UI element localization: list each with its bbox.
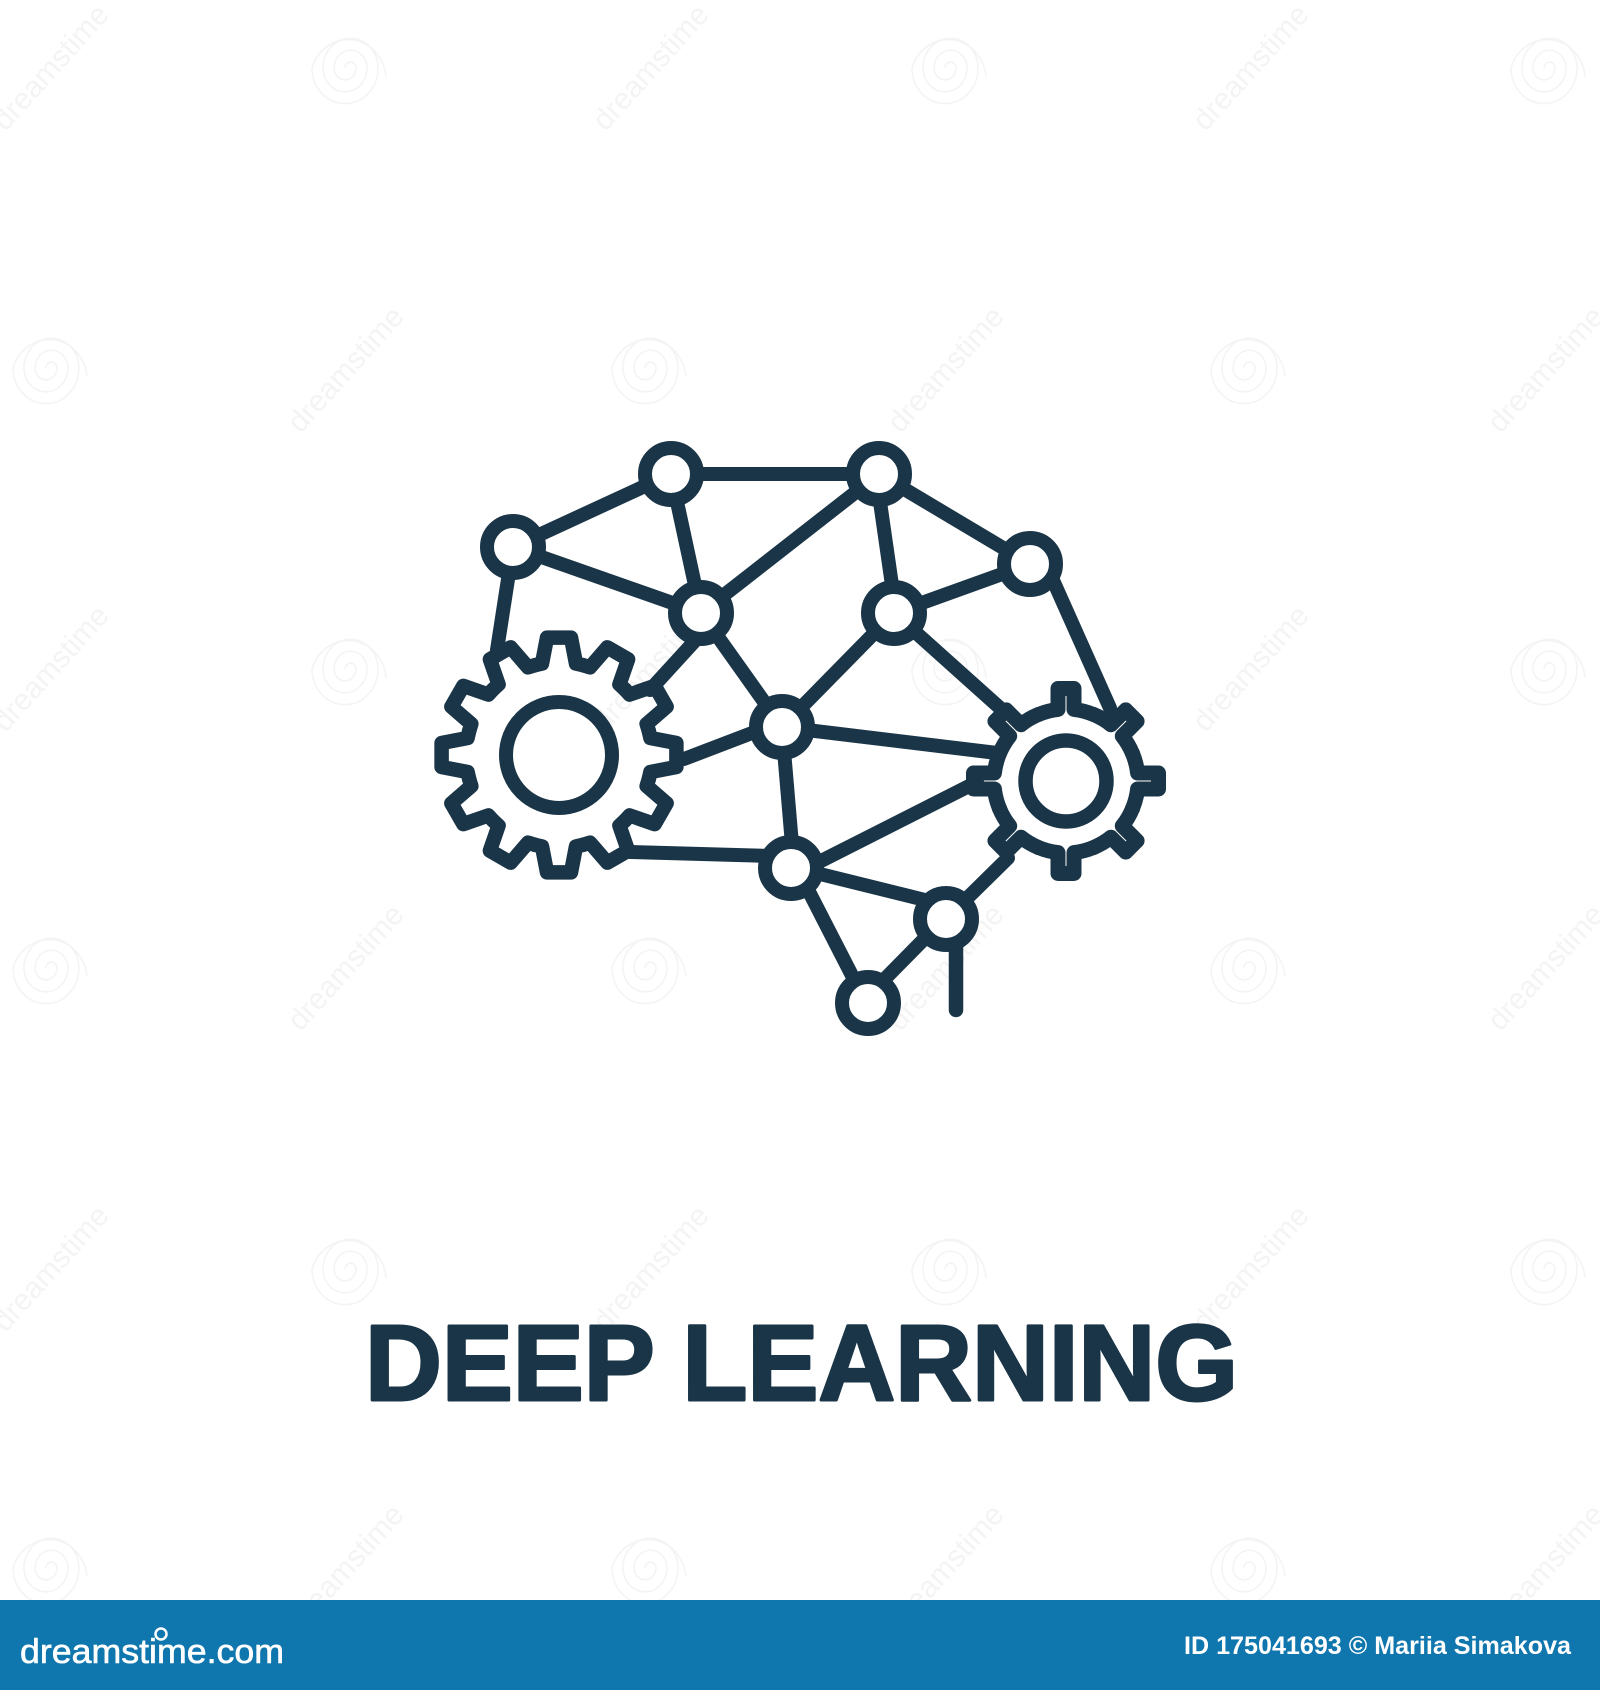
watermark pattern: dreamstime — [881, 1498, 1011, 1637]
watermark pattern: dreamstime — [281, 1498, 411, 1637]
footer bar — [0, 1600, 1600, 1690]
logo: dreamstime: dreamstime.com — [20, 1633, 284, 1671]
watermark pattern: dreamstime — [1186, 1199, 1316, 1338]
watermark pattern: dreamstime — [281, 300, 411, 439]
watermark pattern: dreamstime — [881, 898, 1011, 1037]
network connections — [497, 474, 1110, 1010]
watermark pattern: dreamstime — [881, 300, 1011, 439]
icon: brain network with gears — [442, 448, 1159, 1029]
watermark pattern: dreamstime — [1186, 0, 1316, 137]
network nodes — [487, 448, 1056, 1029]
watermark pattern: dreamstime — [281, 898, 411, 1037]
watermark pattern: dreamstime — [586, 1199, 716, 1338]
watermark pattern: dreamstime — [586, 599, 716, 738]
watermark pattern: dreamstime — [1186, 599, 1316, 738]
small gear — [974, 688, 1158, 874]
image id and author credit: ID 175041693 © Mariia Simakova — [1184, 1632, 1572, 1660]
title: DEEP LEARNING — [365, 1302, 1238, 1423]
watermark pattern: dreamstime — [586, 0, 716, 137]
large gear — [442, 638, 676, 872]
